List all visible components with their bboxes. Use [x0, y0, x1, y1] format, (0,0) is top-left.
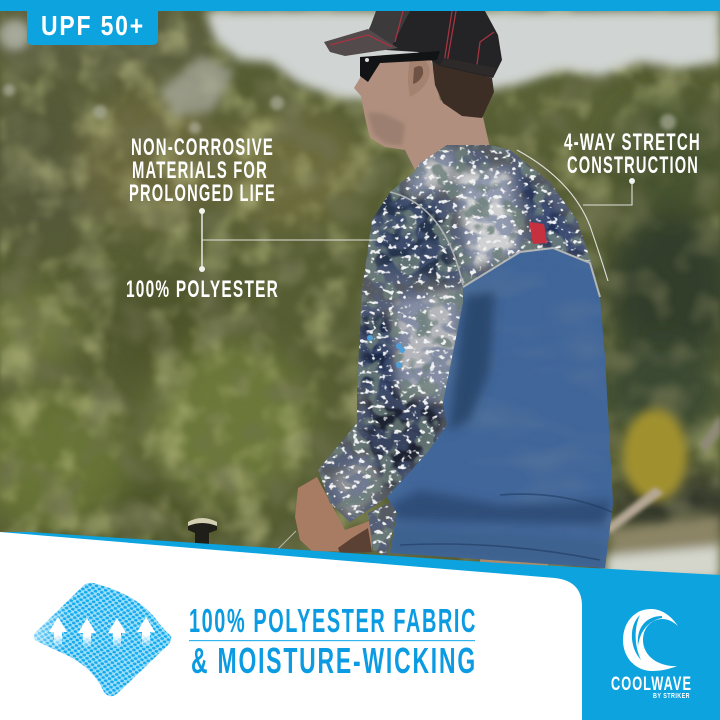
badge: UPF 50+ [27, 0, 158, 45]
icon: moisture-wicking fabric swatch [34, 583, 171, 696]
badge: UPF 50+: UPF 50+ [41, 10, 145, 41]
top blue bar [0, 0, 720, 11]
callout: non-corrosive materials: MATERIALS FOR [132, 157, 268, 184]
leader line: stretch callout to shoulder [517, 150, 635, 281]
hair [432, 60, 494, 118]
sleeve and yoke camo [318, 145, 596, 556]
beard shadow [368, 112, 405, 146]
yellow tree and riverbank [606, 409, 720, 580]
fishing rod reel [188, 518, 217, 546]
hand and wrist [295, 477, 372, 553]
white panel [0, 532, 582, 720]
logo: Coolwave by Striker [611, 609, 692, 700]
bokeh highlights [3, 84, 676, 134]
callout: non-corrosive materials: PROLONGED LIFE [129, 180, 276, 207]
figure: angler seen from behind [188, 11, 620, 575]
blue body panel [380, 245, 620, 575]
sky [0, 11, 720, 118]
leader line: fabric callouts to sleeve [199, 208, 383, 272]
neck and face [354, 55, 490, 170]
headline: fabric and moisture wicking: 100% POLYESTER FABRIC [189, 602, 477, 639]
callout: non-corrosive materials: NON-CORROSIVE [131, 134, 274, 161]
bottom blue band [0, 532, 720, 720]
ear [408, 58, 430, 97]
fishing line [277, 531, 296, 550]
yoke seam [463, 248, 600, 297]
icon: upward arrows [49, 617, 155, 647]
logo: Coolwave by Striker: BY STRIKER [653, 691, 690, 700]
callout: 4-way stretch [564, 129, 701, 179]
hat [324, 11, 502, 78]
logo patch [529, 222, 547, 244]
waist skin strip [480, 556, 548, 566]
callout: 100% polyester: 100% POLYESTER [126, 276, 279, 303]
callout: non-corrosive materials [129, 134, 276, 207]
raglan seam [390, 192, 463, 285]
sunglasses [360, 51, 440, 82]
headline: fabric and moisture wicking [189, 602, 477, 681]
headline: fabric and moisture wicking: & MOISTURE-WICKING [191, 640, 477, 681]
